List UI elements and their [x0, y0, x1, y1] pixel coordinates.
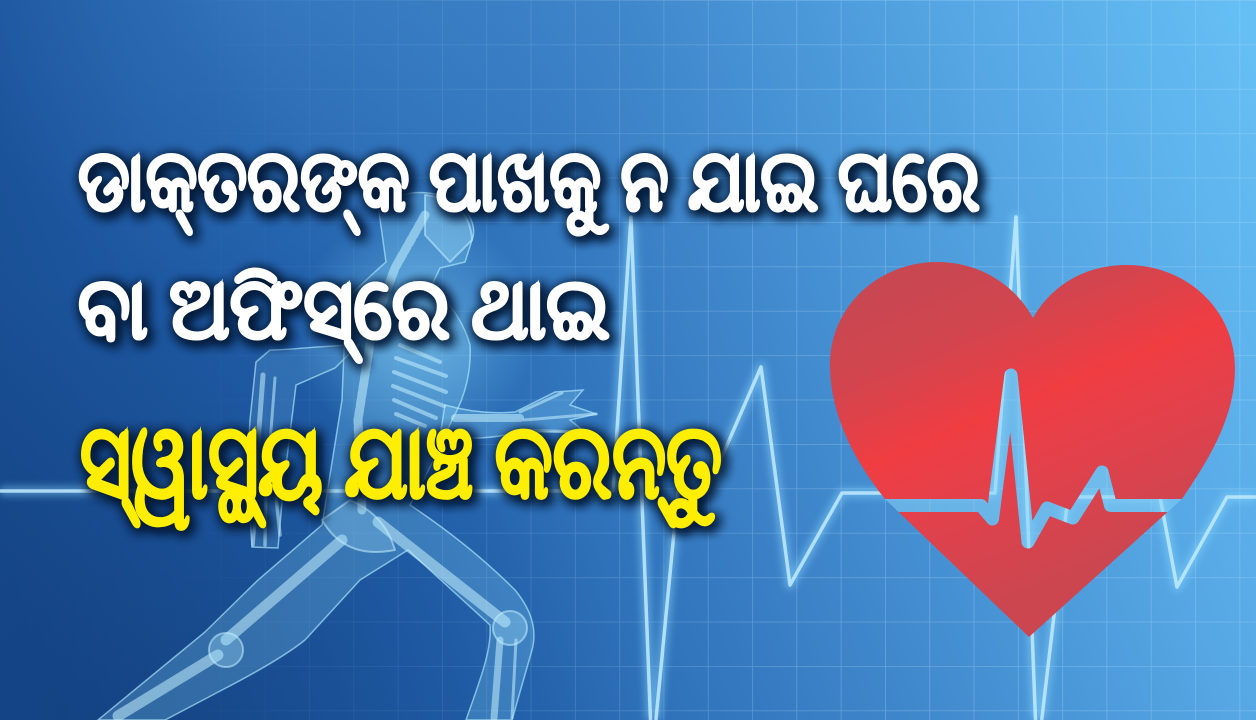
headline line 2: ବା ଅଫିସ୍‌ରେ ଥାଇ — [78, 261, 610, 364]
headline line 3: ସ୍ୱାସ୍ଥ୍ୟ ଯାଞ୍ଚ କରନ୍ତୁ — [80, 404, 722, 530]
heart shape — [830, 262, 1235, 637]
torso glow — [311, 231, 515, 428]
heart pulse line — [860, 375, 1200, 542]
bones — [118, 195, 596, 718]
heart icon with pulse line — [830, 262, 1235, 637]
body silhouette — [98, 192, 596, 720]
running human skeleton figure — [98, 192, 596, 720]
headline line 1: ଡାକ୍ତରଙ୍କ ପାଖକୁ ନ ଯାଇ ଘରେ — [78, 133, 980, 236]
ECG line in background — [0, 217, 1256, 720]
